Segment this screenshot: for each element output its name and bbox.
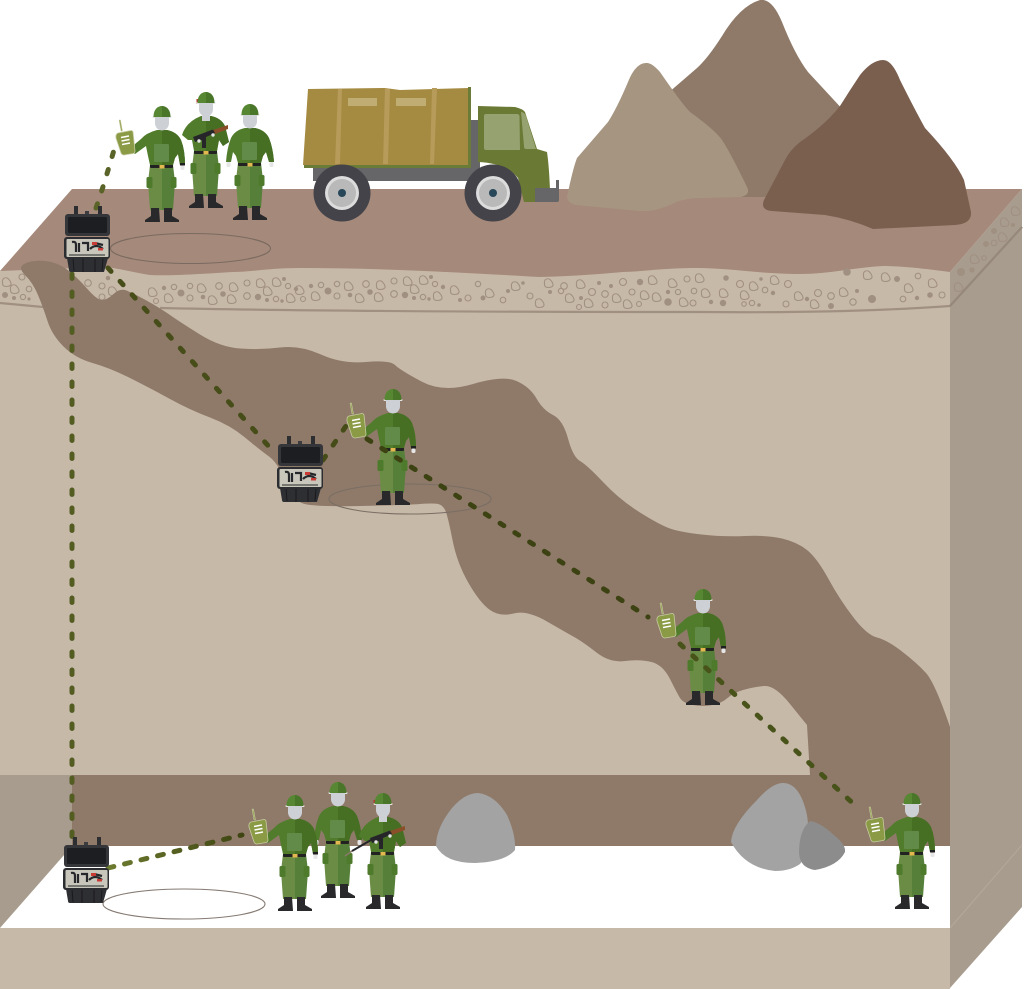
top ground surface: [0, 189, 1022, 277]
gravel layer pebbles: [2, 207, 1020, 310]
truck front wheel: [464, 164, 522, 222]
middle mountain: [660, 0, 845, 197]
light mountain: [567, 63, 748, 211]
ellipse: middle sensing area: [329, 484, 491, 514]
truck tarp: [304, 87, 471, 168]
truck cabin: [478, 106, 550, 202]
small boulder: [799, 821, 845, 870]
dashes: case to surface radio: [96, 150, 114, 208]
truck chassis: [313, 120, 480, 181]
dark mountain: [763, 60, 971, 229]
front face of the block: [0, 258, 950, 989]
soldier with radio, cave lower: [657, 589, 726, 705]
equipment case, cave: [277, 436, 323, 502]
truck bumper: [535, 180, 559, 202]
mountains: [567, 0, 971, 229]
truck rear wheel: [314, 164, 370, 222]
dashes: vertical surface to tunnel: [70, 274, 74, 838]
ellipse: bottom sensing area: [103, 889, 265, 919]
boulder: [436, 793, 515, 863]
soldier with rifle, surface: [182, 92, 229, 208]
soldier with radio, tunnel right: [866, 793, 935, 909]
tunnel left wall: [0, 775, 72, 928]
equipment case, surface: [64, 206, 110, 272]
dashes: cave radio to lower radio: [367, 439, 648, 617]
ellipse: top sensing area: [110, 234, 270, 264]
tunnel floor: [0, 846, 950, 928]
soldier, surface: [226, 104, 274, 220]
cave passage: [21, 261, 950, 775]
soldier with radio, cave upper: [347, 389, 416, 505]
truck: [303, 87, 559, 222]
dashes: lower radio to tunnel radio: [680, 644, 858, 808]
large boulder: [731, 783, 808, 871]
soldier with radio, surface: [116, 106, 185, 222]
right side face of the block: [950, 189, 1022, 988]
underground tunnel back wall: [72, 775, 950, 847]
dashes: cave case to cave radio: [323, 426, 346, 460]
soldier with rifle, tunnel: [345, 793, 406, 909]
dashes: tunnel case to tunnel radio: [108, 835, 242, 868]
soldier, tunnel back: [314, 782, 362, 898]
signal dashes: [72, 150, 858, 868]
layer lines: [0, 227, 1022, 928]
soldier with radio, tunnel: [249, 795, 318, 911]
dashes: surface case to cave case: [108, 268, 272, 450]
equipment case, tunnel: [63, 837, 109, 903]
